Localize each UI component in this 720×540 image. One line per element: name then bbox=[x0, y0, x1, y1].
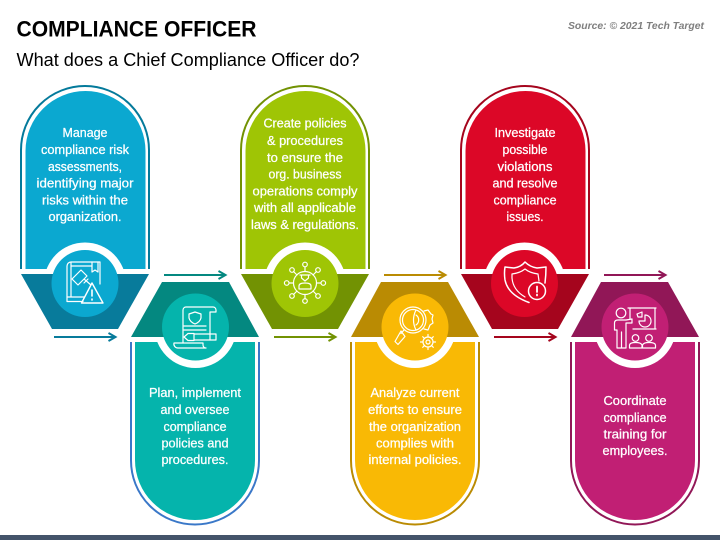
text: investigate: compliance bbox=[494, 194, 557, 208]
text: plan: policies and bbox=[162, 436, 229, 450]
text: coordinate: employees. bbox=[602, 444, 668, 458]
icon: trainer with audience bbox=[614, 308, 656, 348]
icon: gavel book and warning bbox=[67, 262, 103, 303]
arrow: step 4 to 5 bbox=[384, 271, 446, 279]
arrow: step 2 to 3 bbox=[164, 271, 226, 279]
text: analyze: complies with bbox=[376, 436, 454, 450]
subtitle: What does a Chief Compliance Officer do? bbox=[16, 49, 360, 70]
text: coordinate: compliance bbox=[604, 411, 667, 425]
text: create: operations comply bbox=[252, 184, 358, 198]
panel: coordinate training bbox=[571, 282, 699, 524]
footer bar bbox=[0, 535, 720, 540]
arrow: step 3 to 4 bbox=[274, 333, 336, 341]
text: investigate: issues. bbox=[506, 210, 544, 224]
arrow: step 1 to 2 bbox=[54, 333, 116, 341]
text: create: with all applicable bbox=[253, 201, 356, 215]
text: create: & procedures bbox=[267, 134, 343, 148]
text: plan bbox=[149, 386, 242, 467]
text: create: laws & regulations. bbox=[251, 218, 359, 232]
source note: Source: © 2021 Tech Target bbox=[568, 20, 704, 32]
text: coordinate bbox=[602, 394, 668, 458]
text: manage: compliance risk bbox=[41, 143, 130, 157]
text: plan: and oversee bbox=[160, 403, 230, 417]
icon: network with person bbox=[284, 262, 326, 303]
text: analyze: efforts to ensure bbox=[368, 403, 462, 417]
panel: manage risk assessments bbox=[21, 86, 149, 329]
text: manage: organization. bbox=[48, 210, 122, 224]
text: plan: Plan, implement bbox=[149, 386, 242, 400]
text: manage: Manage bbox=[62, 126, 108, 140]
text: investigate: possible bbox=[502, 143, 548, 157]
icon: magnifier and gears bbox=[395, 307, 436, 350]
panel: analyze efforts bbox=[351, 282, 479, 524]
text: analyze: Analyze current bbox=[370, 386, 460, 400]
text: manage bbox=[36, 126, 134, 224]
title: COMPLIANCE OFFICER bbox=[16, 17, 256, 42]
icon: shield with alert bbox=[504, 262, 546, 302]
text: create: to ensure the bbox=[267, 151, 343, 165]
text: coordinate: Coordinate bbox=[604, 394, 667, 408]
text: manage: identifying major bbox=[36, 176, 134, 190]
text: investigate: and resolve bbox=[492, 176, 558, 190]
text: investigate bbox=[492, 126, 558, 224]
text: analyze bbox=[368, 386, 462, 467]
text: investigate: Investigate bbox=[494, 126, 556, 140]
arrow: step 6 onward bbox=[604, 271, 666, 279]
text: analyze: internal policies. bbox=[368, 453, 462, 467]
text: manage: risks within the bbox=[42, 194, 128, 208]
text: create bbox=[251, 116, 359, 232]
text: manage: assessments, bbox=[48, 160, 122, 174]
panel: plan and implement bbox=[131, 282, 259, 524]
text: plan: procedures. bbox=[162, 453, 228, 467]
icon: scroll with pen bbox=[174, 307, 216, 348]
text: coordinate: training for bbox=[604, 428, 666, 442]
panel: create policies bbox=[241, 86, 369, 329]
text: investigate: violations bbox=[498, 160, 552, 174]
text: analyze: the organization bbox=[369, 420, 461, 434]
text: create: Create policies bbox=[264, 116, 346, 130]
text: plan: compliance bbox=[164, 420, 227, 434]
text: create: org. business bbox=[268, 168, 342, 182]
arrow: step 5 to 6 bbox=[494, 333, 556, 341]
panel: investigate violations bbox=[461, 86, 589, 329]
